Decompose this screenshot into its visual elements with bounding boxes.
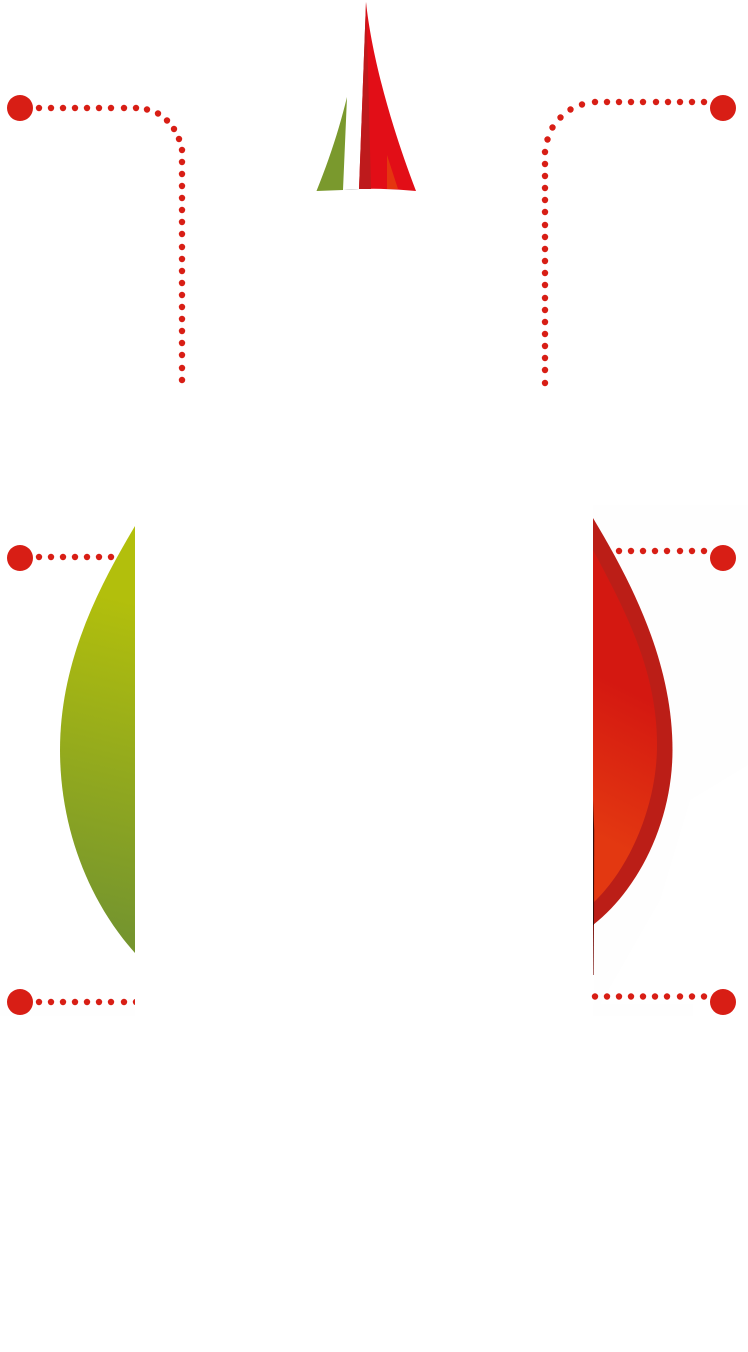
sail: red	[359, 2, 416, 191]
red leaf: thin trailing edge	[593, 925, 594, 975]
sail logo	[316, 2, 416, 191]
connector: middle right	[616, 545, 736, 571]
faint background shading	[0, 505, 748, 1016]
red leaf: dark outer	[593, 518, 672, 925]
sail: dark red fold	[359, 2, 371, 189]
sail: orange	[387, 155, 398, 189]
infographic canvas	[7, 2, 736, 1015]
connector: top right	[542, 95, 736, 386]
connector: middle left	[7, 545, 114, 571]
sail: white base shadow	[343, 189, 360, 190]
connector: top left	[7, 95, 185, 383]
sail: green	[316, 97, 347, 191]
green leaf shape	[60, 526, 135, 953]
connector: bottom right	[592, 989, 736, 1015]
red leaf shape	[593, 518, 672, 975]
connector: bottom left	[7, 989, 139, 1015]
red leaf: bright inner	[593, 550, 657, 903]
red leaf: thin dark edge	[593, 800, 594, 925]
